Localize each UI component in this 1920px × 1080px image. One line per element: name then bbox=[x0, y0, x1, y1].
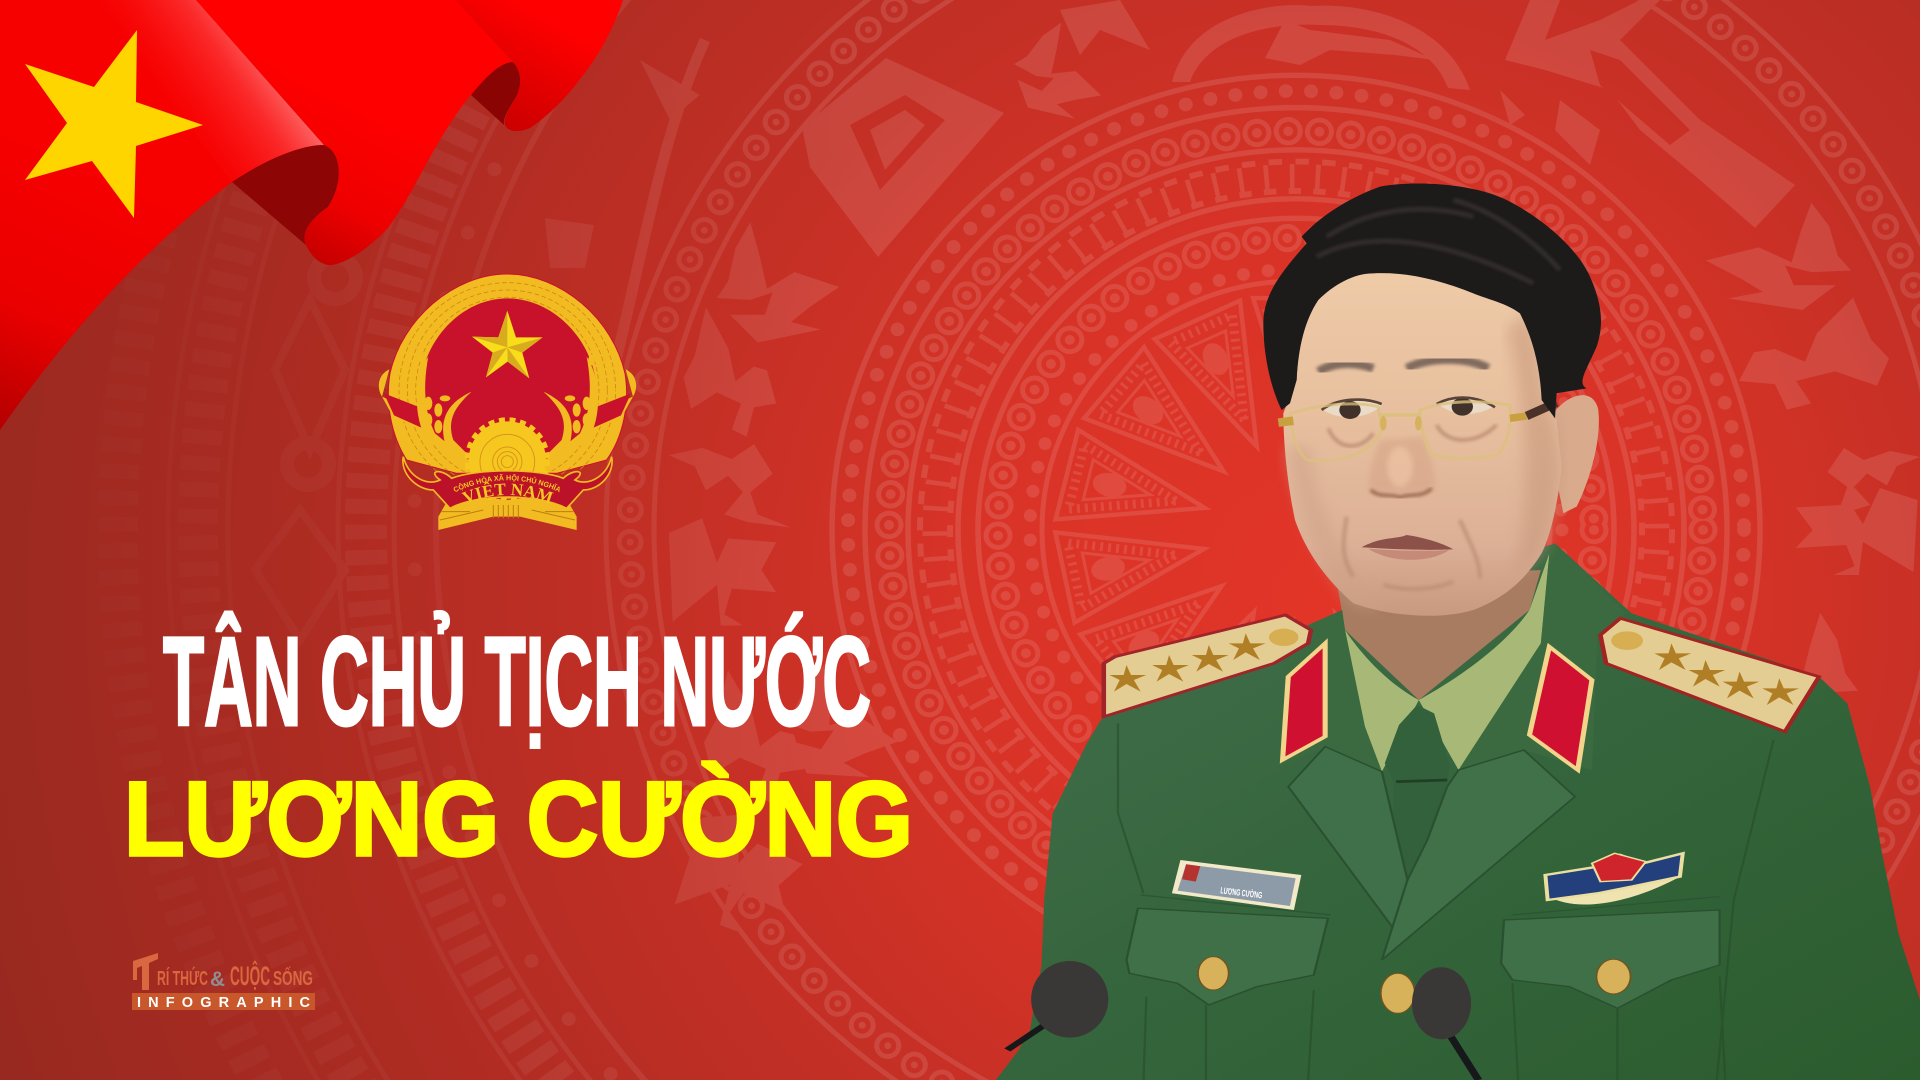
flag highlight band bbox=[87, 0, 324, 182]
jacket body bbox=[996, 543, 1920, 1080]
nose tip light bbox=[1387, 447, 1413, 487]
logo ampersand: & bbox=[210, 968, 225, 991]
right collar tab bbox=[1529, 647, 1592, 770]
right ear bbox=[1553, 395, 1599, 513]
logo band bbox=[132, 993, 315, 1010]
lower lip bbox=[1368, 549, 1449, 560]
uniform bbox=[996, 543, 1920, 1080]
second fold shadow bbox=[471, 62, 520, 125]
left eyebrow bbox=[1318, 364, 1373, 372]
emblem right ribbon bbox=[588, 369, 636, 432]
left epaulette bbox=[1104, 615, 1311, 717]
emblem motto: CỘNG HÒA XÃ HỘI CHỦ NGHĨA bbox=[454, 474, 560, 492]
lower face folds bbox=[1344, 517, 1480, 589]
medal badge bbox=[1545, 853, 1683, 904]
hair bbox=[1263, 183, 1601, 418]
right eye bbox=[1437, 398, 1495, 416]
name tag bbox=[1172, 860, 1301, 910]
portrait of Lương Cường in military uniform bbox=[996, 183, 1920, 1080]
emblem gold star bbox=[472, 311, 543, 378]
right chest pocket bbox=[1501, 910, 1720, 1008]
name tag: LƯƠNG CƯỜNG bbox=[1220, 884, 1263, 900]
hair highlights bbox=[1317, 200, 1560, 283]
shirt collar left bbox=[1345, 630, 1419, 772]
left eye bbox=[1322, 400, 1382, 419]
left collar tab bbox=[1283, 643, 1325, 760]
emblem left rice bbox=[417, 355, 472, 463]
emblem text curve large bbox=[461, 495, 555, 506]
right lapel bbox=[1382, 750, 1575, 960]
title line: TÂN CHỦ TỊCH NƯỚC: TÂN CHỦ TỊCH NƯỚC bbox=[163, 611, 871, 752]
emblem name: VIỆT NAM bbox=[461, 482, 554, 504]
emblem banner bbox=[403, 457, 612, 508]
logo CUỘC: CUỘC bbox=[230, 960, 270, 991]
logo INFOGRAPHIC: INFOGRAPHIC bbox=[137, 995, 311, 1011]
jacket collar right bbox=[1459, 543, 1626, 770]
left pocket button bbox=[1198, 957, 1229, 990]
national emblem bbox=[378, 274, 636, 530]
emblem pedestal bbox=[438, 493, 577, 530]
emblem wreath ring bbox=[388, 274, 627, 473]
left microphone bbox=[1007, 961, 1108, 1050]
right face shade bbox=[1507, 313, 1562, 580]
publisher logo: Tri thuc & Cuoc song Infographic bbox=[132, 953, 315, 1011]
right microphone bbox=[1412, 967, 1478, 1080]
Vietnamese flag ribbon, top left bbox=[0, 0, 623, 430]
jacket collar left bbox=[1280, 610, 1382, 772]
pocket pleats bbox=[1141, 895, 1720, 915]
jacket front button bbox=[1381, 973, 1415, 1013]
neck bbox=[1337, 570, 1541, 700]
emblem gear bbox=[467, 420, 548, 500]
right eyebrow bbox=[1407, 360, 1488, 368]
head bbox=[1263, 183, 1601, 616]
emblem text curve small bbox=[455, 480, 559, 492]
yellow flag star bbox=[25, 30, 203, 218]
nostril line bbox=[1371, 488, 1432, 497]
wreath grain texture bbox=[399, 283, 616, 497]
right pocket button bbox=[1596, 959, 1631, 994]
emblem right rice bbox=[543, 355, 598, 463]
flag panel with long lower edge bbox=[0, 0, 324, 430]
name line: LƯƠNG CƯỜNG: LƯƠNG CƯỜNG bbox=[124, 761, 913, 878]
face bbox=[1283, 263, 1562, 616]
left lapel bbox=[1288, 747, 1407, 928]
logo large T bbox=[133, 953, 158, 990]
shirt collar right bbox=[1419, 553, 1549, 770]
emblem left ribbon bbox=[379, 369, 427, 432]
right flag panel bbox=[455, 0, 623, 131]
tie knot crease bbox=[1396, 780, 1447, 782]
sleeve seams bbox=[1118, 723, 1774, 1080]
right epaulette bbox=[1600, 618, 1819, 732]
under-eye bags bbox=[1328, 425, 1497, 446]
middle flag panel bbox=[196, 0, 513, 265]
nose side shadow bbox=[1369, 437, 1435, 493]
first fold shadow bbox=[232, 145, 339, 245]
glasses bbox=[1278, 402, 1557, 461]
logo RÍ THỨC: RÍ THỨC bbox=[157, 966, 208, 990]
necktie bbox=[1385, 705, 1450, 877]
left chest pocket bbox=[1126, 908, 1328, 1005]
mouth bbox=[1362, 535, 1453, 550]
emblem red field bbox=[420, 298, 597, 460]
logo SỐNG: SỐNG bbox=[273, 966, 313, 990]
left jaw shade bbox=[1287, 447, 1380, 610]
